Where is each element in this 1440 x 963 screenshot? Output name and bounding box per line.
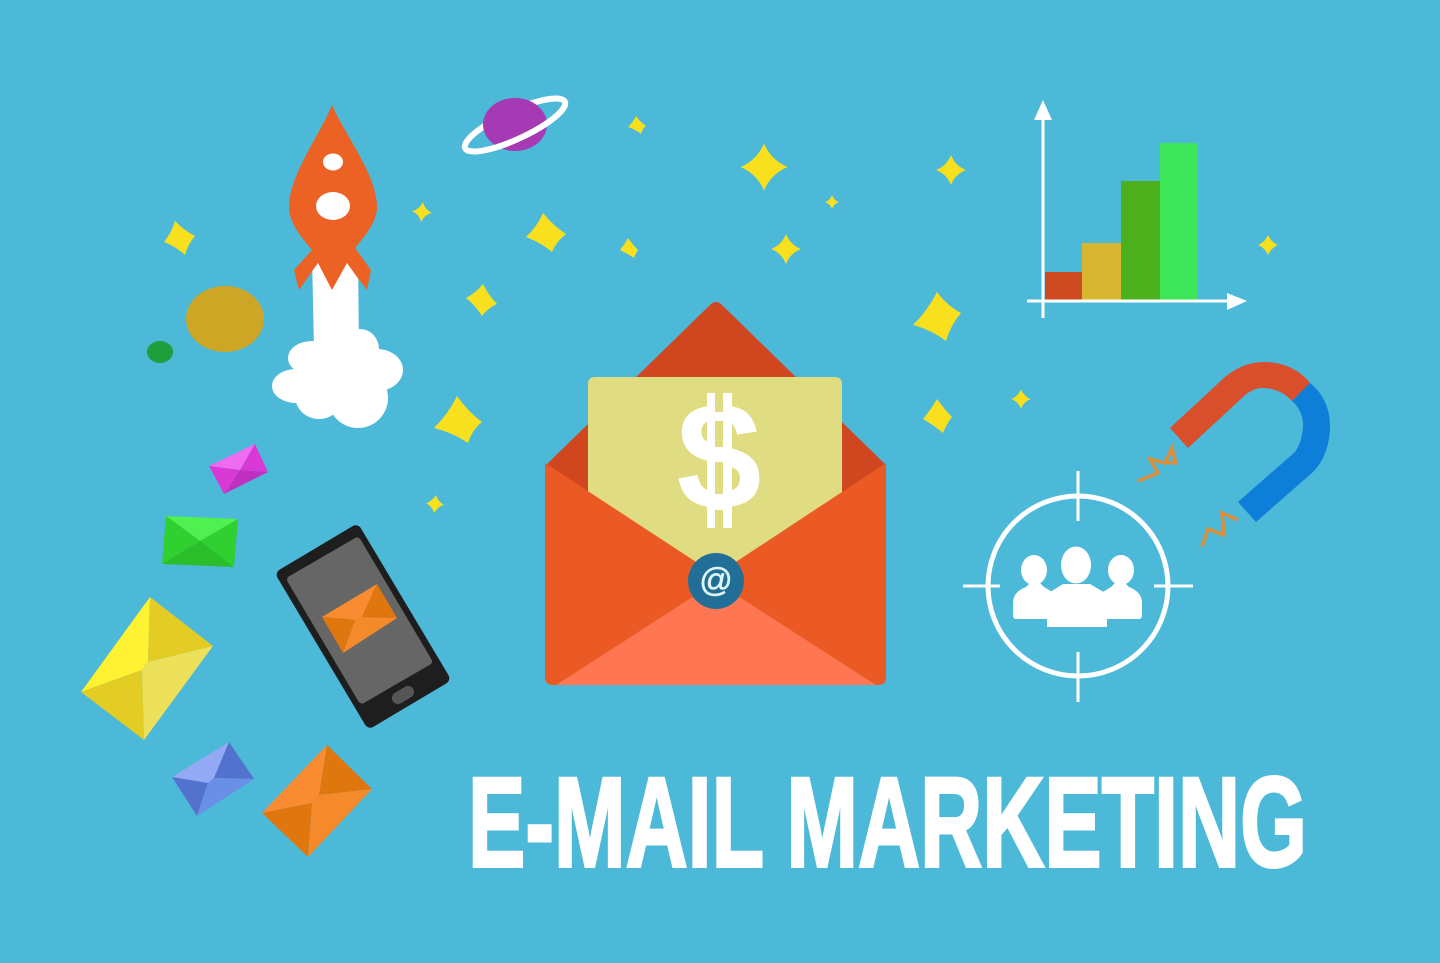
target ring (988, 496, 1168, 676)
icon: rocket with smoke cloud (272, 105, 403, 428)
envelope: magenta (209, 444, 268, 494)
magnet blue pole (1238, 383, 1330, 522)
envelope: blue (172, 742, 254, 816)
phone home button (390, 684, 416, 706)
axes (1027, 100, 1247, 318)
green planet dot (147, 341, 173, 363)
exhaust flame (312, 255, 359, 350)
at-sign seal: @ (699, 561, 733, 598)
smoke cloud (272, 329, 403, 428)
phone body (274, 523, 452, 730)
magnet sparks (1138, 448, 1238, 547)
dollar sign: $ (676, 371, 762, 542)
people group (1013, 546, 1142, 627)
envelope: yellow (81, 597, 213, 740)
magnet red pole (1170, 362, 1310, 448)
rocket large window (316, 192, 350, 220)
envelope bottom panel (556, 582, 876, 685)
yellow stars (164, 116, 1278, 514)
envelope: green (162, 516, 238, 567)
gold planet dot (186, 286, 264, 352)
crosshair ticks (963, 471, 1193, 702)
rocket small window (323, 154, 343, 170)
back flap (546, 302, 886, 600)
phone screen (291, 541, 428, 700)
bar chart (1027, 100, 1247, 318)
icon: audience target (963, 471, 1193, 702)
envelope front panels (545, 463, 886, 685)
icon: ringed purple planet (459, 89, 571, 161)
yellow letter (588, 377, 842, 600)
icon: horseshoe magnet (1138, 362, 1330, 547)
at-sign seal (688, 553, 744, 609)
rocket body (289, 105, 377, 290)
main open envelope (545, 302, 886, 685)
envelope: orange (262, 745, 372, 857)
phone envelope (322, 584, 397, 653)
bars (1045, 143, 1198, 300)
icon: smartphone with email (274, 523, 452, 730)
